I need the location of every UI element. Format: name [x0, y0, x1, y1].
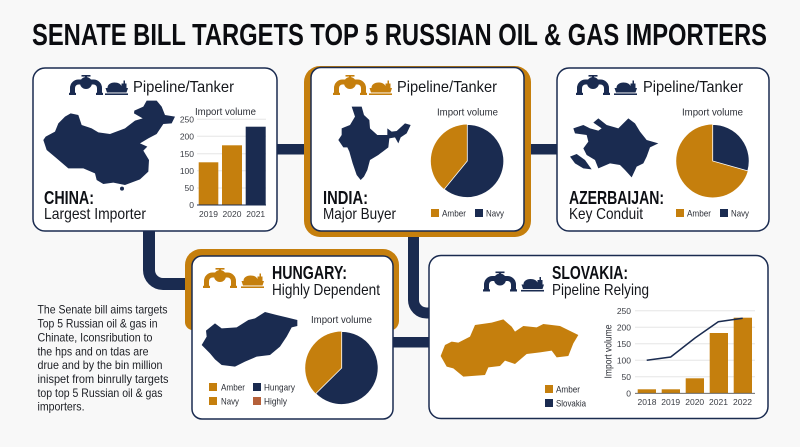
pie chart: Azerbaijan import volume	[676, 106, 749, 220]
legend: Hungary	[209, 382, 295, 408]
pie chart: Hungary import volume	[305, 314, 378, 404]
bar chart: China import volume: 200	[180, 132, 194, 142]
bar chart: China import volume: 0	[189, 200, 194, 210]
pie chart: India import volume: Amber	[442, 208, 466, 220]
body text: inispet from binrully targets	[38, 372, 168, 386]
bar chart: China import volume: 50	[185, 183, 194, 193]
connector: Hungary to Slovakia	[393, 337, 430, 348]
icon: tanker	[241, 274, 264, 288]
pie chart: India import volume: Import volume	[437, 106, 498, 118]
body text: Top 5 Russian oil & gas in	[38, 316, 158, 330]
legend: Hungary: Highly	[264, 396, 287, 408]
combo chart: Slovakia import volume: 2022	[733, 397, 752, 407]
bar chart: China import volume	[180, 106, 266, 219]
icon: tanker	[105, 80, 128, 95]
transport label: Pipeline/Tanker	[643, 79, 744, 96]
body text: the hps and on tdas are	[38, 344, 149, 358]
pie chart: India import volume	[431, 106, 504, 220]
country descriptor: Largest Importer	[44, 206, 147, 223]
icon: pipeline	[333, 75, 367, 95]
transport label: Pipeline/Tanker	[133, 79, 235, 96]
legend: Hungary: Amber	[221, 382, 245, 394]
pie chart: Azerbaijan import volume: Import volume	[682, 106, 743, 118]
country name: INDIA:	[323, 187, 368, 208]
pie chart: Azerbaijan import volume: Amber	[687, 208, 711, 220]
connector: India to Slovakia	[414, 235, 431, 313]
legend: Hungary: Navy	[221, 396, 239, 408]
panel: Azerbaijan	[557, 68, 769, 231]
bar chart: China import volume: 250	[180, 114, 194, 124]
country descriptor: Key Conduit	[569, 206, 643, 223]
bar chart: China import volume: 2020	[223, 209, 242, 219]
map: India	[338, 107, 411, 180]
panel: India	[304, 66, 531, 237]
icon: pipeline	[483, 272, 517, 292]
country name: SLOVAKIA:	[552, 262, 628, 283]
combo chart: Slovakia import volume: 2018	[638, 397, 657, 407]
combo chart: Slovakia import volume: 200	[617, 322, 631, 332]
panel: Slovakia	[429, 256, 768, 418]
country name: AZERBAIJAN:	[569, 187, 664, 208]
combo chart: Slovakia import volume: 150	[617, 339, 631, 349]
map: Azerbaijan	[570, 118, 658, 177]
panel: China	[33, 68, 277, 231]
legend: Slovakia: Amber	[556, 384, 580, 396]
country descriptor: Pipeline Relying	[552, 282, 649, 299]
icon: pipeline	[203, 268, 237, 288]
connector: China to India	[277, 144, 307, 154]
combo chart: Slovakia import volume: 50	[622, 372, 631, 382]
body text: top top 5 Russian oil & gas	[38, 386, 162, 400]
map: China	[43, 101, 175, 191]
transport label: Pipeline/Tanker	[397, 79, 498, 96]
legend: Hungary: Hungary	[264, 382, 295, 394]
bar chart: China import volume: 100	[180, 166, 194, 176]
legend: Slovakia	[545, 384, 587, 410]
combo chart: Slovakia import volume: 250	[617, 306, 631, 316]
panel: Hungary	[185, 249, 399, 419]
bar chart: China import volume: 150	[180, 149, 194, 159]
icon: pipeline	[69, 75, 103, 95]
body text: The Senate bill aims targets	[38, 302, 168, 316]
bar chart: China import volume: 2019	[199, 209, 218, 219]
combo chart: Slovakia import volume: 2019	[661, 397, 680, 407]
body text: drue and by the bin million	[38, 358, 162, 372]
combo chart: Slovakia import volume: 100	[617, 356, 631, 366]
icon: pipeline	[576, 75, 610, 95]
icon: tanker	[521, 277, 544, 292]
map: Hungary	[202, 312, 297, 367]
country descriptor: Major Buyer	[323, 206, 397, 223]
combo chart: Slovakia import volume: 2020	[685, 397, 704, 407]
combo chart: Slovakia import volume: Import volume	[602, 324, 614, 378]
combo chart: Slovakia import volume: 0	[626, 388, 631, 398]
body text: Chinate, Iconsribution to	[38, 330, 153, 344]
icon: tanker	[369, 80, 392, 95]
map: Slovakia	[441, 319, 578, 377]
icon: tanker	[614, 80, 637, 95]
combo chart: Slovakia import volume: 2021	[709, 397, 728, 407]
body text: importers.	[38, 400, 84, 414]
country name: CHINA:	[44, 187, 94, 208]
connector: China to Hungary	[149, 231, 190, 284]
pie chart: Hungary import volume: Import volume	[311, 314, 372, 326]
combo chart: Slovakia import volume	[602, 306, 755, 407]
pie chart: Azerbaijan import volume: Navy	[731, 208, 749, 220]
bar chart: China import volume: Import volume	[195, 106, 256, 118]
country descriptor: Highly Dependent	[272, 282, 380, 299]
country name: HUNGARY:	[272, 262, 347, 283]
pie chart: India import volume: Navy	[486, 208, 504, 220]
connector: India to Azerbaijan	[528, 144, 558, 154]
bar chart: China import volume: 2021	[246, 209, 265, 219]
legend: Slovakia: Slovakia	[556, 398, 587, 410]
body text	[38, 302, 168, 414]
